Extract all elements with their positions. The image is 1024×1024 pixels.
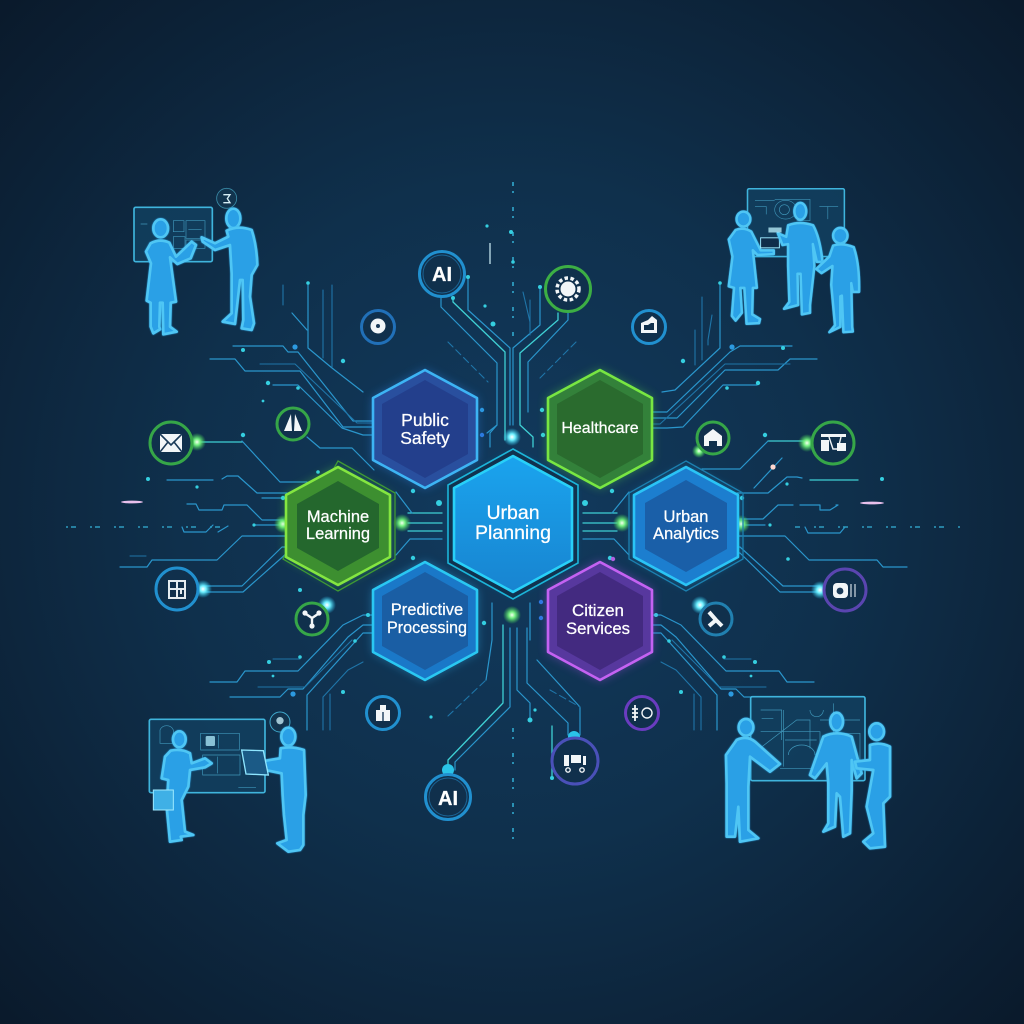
people: top left pair at board xyxy=(134,188,257,334)
icon: envelope xyxy=(150,422,192,464)
icon: triangle tents xyxy=(277,408,309,440)
icon: AI top xyxy=(420,252,464,296)
lower right circuit fan xyxy=(649,613,814,730)
icon: chart board xyxy=(632,310,666,344)
hexagon: urban planning centre: Planning xyxy=(475,522,551,544)
presentation board xyxy=(748,189,844,257)
hexagon: predictive processing: Processing xyxy=(387,619,467,637)
circuit network xyxy=(66,182,960,852)
icon: coin xyxy=(626,696,658,730)
hub connector traces xyxy=(396,408,629,625)
hexagon: predictive processing: Predictive xyxy=(391,601,463,619)
blueprint board xyxy=(751,697,865,781)
speech bubble xyxy=(217,188,237,208)
figure: man in suit xyxy=(768,203,822,314)
figure: woman xyxy=(146,219,196,334)
icon: camera xyxy=(824,569,866,611)
hexagon: public safety: Safety xyxy=(400,428,450,448)
spark left xyxy=(121,501,143,503)
hexagon: machine learning: Machine xyxy=(307,508,369,526)
hexagon: healthcare xyxy=(548,370,652,488)
icon: factory xyxy=(812,422,854,464)
hexagon: healthcare: Healthcare xyxy=(561,420,639,437)
icon: AI top: AI xyxy=(432,264,452,286)
figure: man pointing xyxy=(726,719,780,842)
figure: man in suit xyxy=(810,713,862,837)
hexagon: urban analytics: Analytics xyxy=(653,525,719,543)
icon: robot arm xyxy=(700,603,732,635)
hexagon: public safety xyxy=(373,370,477,488)
icon: network node xyxy=(296,603,328,635)
hexagon: machine learning: Learning xyxy=(306,525,370,543)
icon: small building xyxy=(366,696,400,730)
hexagon: citizen services: Services xyxy=(566,619,630,638)
hexagon: citizen services: Citizen xyxy=(572,601,624,620)
icon: AI bottom: AI xyxy=(438,788,458,810)
hexagon: predictive processing xyxy=(373,562,477,680)
hexagon: urban analytics: Urban xyxy=(664,508,708,526)
upper left circuit fan xyxy=(210,281,375,435)
people: bottom left pair at board xyxy=(149,712,306,852)
glow nodes xyxy=(188,428,829,776)
icon: gear xyxy=(546,266,590,312)
lower left circuit fan xyxy=(210,613,375,730)
figure: child xyxy=(816,228,859,332)
icon: AI bottom xyxy=(426,774,470,820)
presentation board xyxy=(149,719,265,793)
upper right circuit fan xyxy=(650,281,817,428)
figure: man with briefcase xyxy=(153,731,212,842)
people: bottom right trio at blueprint board xyxy=(726,697,890,848)
left side traces xyxy=(120,433,374,592)
right side traces xyxy=(702,433,907,592)
hexagon: urban analytics xyxy=(629,461,743,591)
people: top right trio at board xyxy=(729,189,859,332)
icon: truck xyxy=(552,738,598,784)
top centre traces xyxy=(441,224,576,447)
dotted data streams xyxy=(66,182,960,852)
hexagon: public safety: Public xyxy=(401,410,449,430)
figure: man with tablet xyxy=(242,728,306,852)
icon: small dial xyxy=(362,310,394,344)
badge icon xyxy=(270,712,290,732)
bottom centre traces xyxy=(429,603,580,780)
hexagon: urban planning centre xyxy=(448,449,578,599)
hexagon: machine learning xyxy=(283,461,395,591)
hexagon: urban planning centre: Urban xyxy=(486,502,540,524)
icon: city map xyxy=(156,568,198,610)
icon: house xyxy=(697,422,729,454)
figure: third person xyxy=(855,723,890,848)
hexagon: citizen services xyxy=(548,562,652,680)
figure: man xyxy=(202,209,257,330)
figure: woman with tablet xyxy=(729,212,779,324)
spark right xyxy=(860,502,884,504)
presentation board xyxy=(134,207,212,262)
